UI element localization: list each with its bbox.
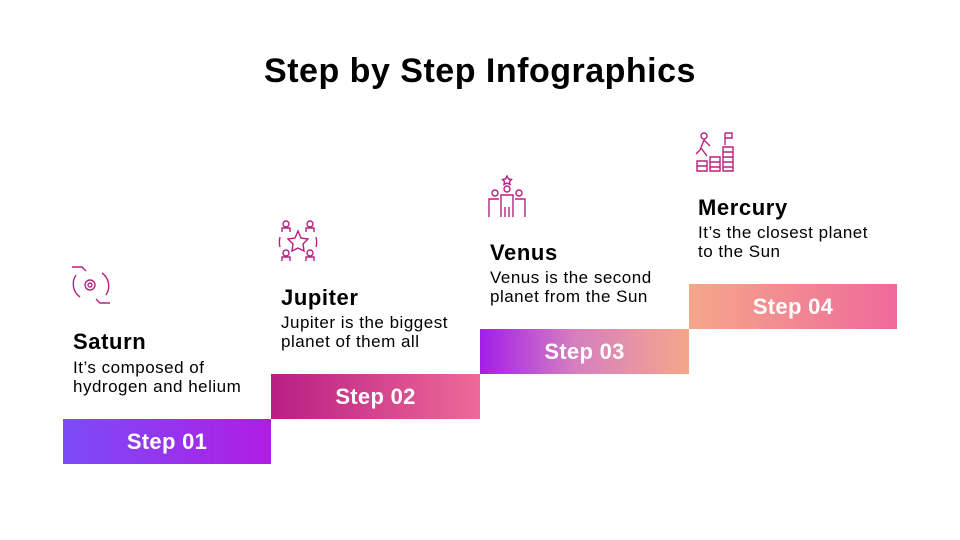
heading: Jupiter: Jupiter [281, 285, 359, 310]
text: Saturn: hydrogen and helium [73, 377, 241, 396]
heading: Mercury: Mercury [698, 195, 788, 220]
text: Venus [490, 268, 652, 306]
text: Jupiter: Jupiter is the biggest [281, 313, 448, 332]
text: Saturn [73, 358, 241, 396]
text: Jupiter [281, 313, 448, 351]
icon: mercury climb [696, 132, 734, 172]
text: Mercury: It’s the closest planet [698, 223, 868, 242]
title: Step by Step Infographics [264, 52, 696, 90]
heading: Venus: Venus [490, 240, 558, 265]
bar: step 03: Step 03 [544, 338, 625, 364]
icon: saturn gear hands [72, 266, 110, 304]
bar: step 02 [271, 374, 480, 419]
text: Venus: planet from the Sun [490, 287, 648, 306]
text: Mercury: to the Sun [698, 242, 781, 261]
icon: venus group [488, 175, 526, 217]
bar: step 04: Step 04 [753, 294, 833, 318]
icon: jupiter star team [278, 220, 318, 261]
text: Jupiter: planet of them all [281, 332, 419, 351]
bar: step 03 [480, 329, 689, 374]
bar: step 01 [63, 419, 271, 464]
bar: step 04 [689, 284, 897, 329]
bar: step 02: Step 02 [335, 384, 416, 408]
text: Venus: Venus is the second [490, 268, 652, 287]
text: Mercury [698, 223, 868, 261]
text: Saturn: It’s composed of [73, 358, 204, 377]
bar: step 01: Step 01 [127, 428, 207, 454]
heading: Saturn: Saturn [73, 329, 146, 354]
